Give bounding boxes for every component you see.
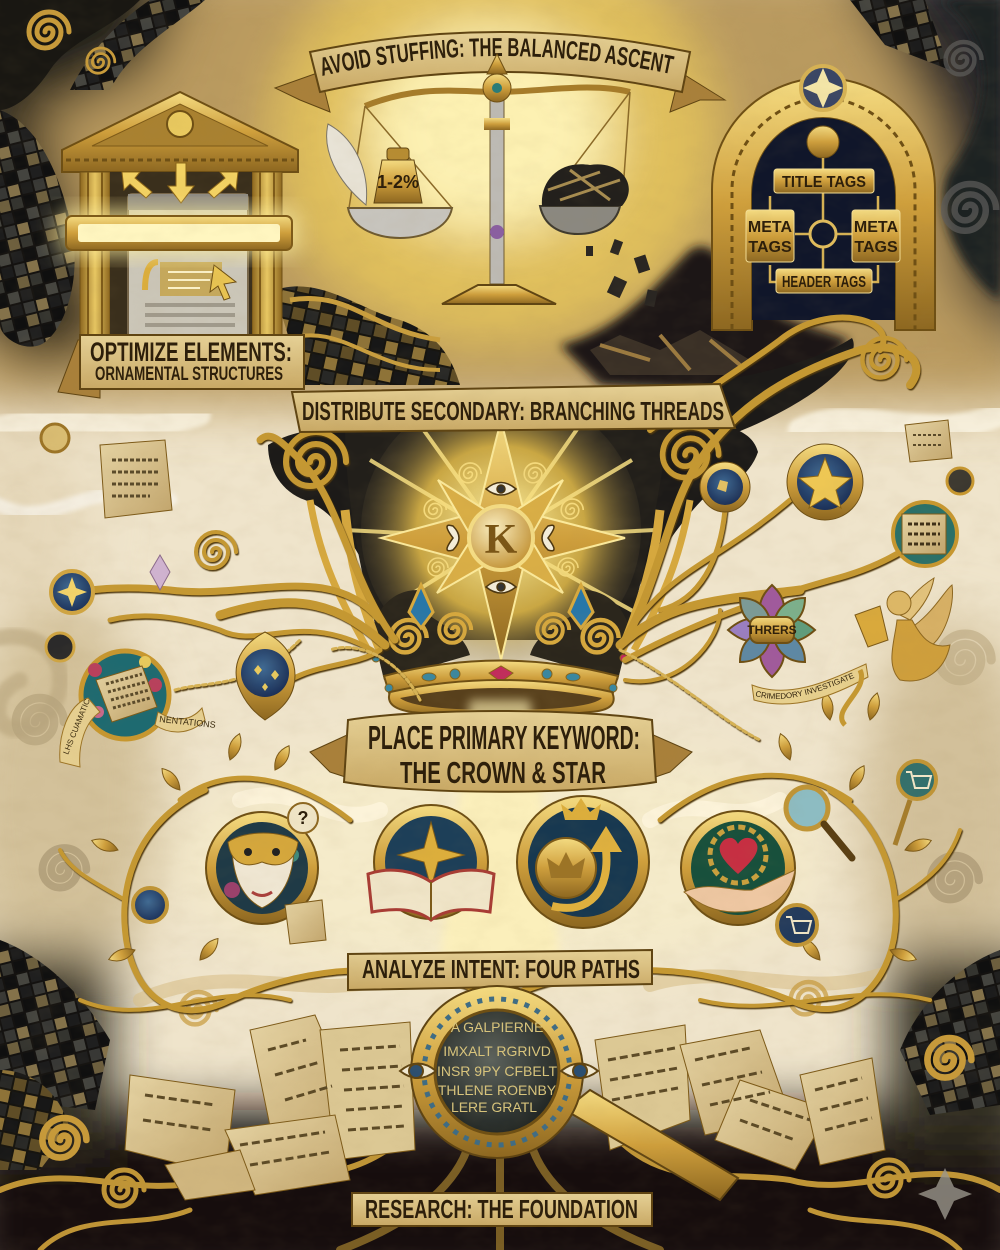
banner: analyze intent: ANALYZE INTENT: FOUR PATHS <box>362 954 640 984</box>
star glow <box>361 390 641 670</box>
schematic connectors <box>770 158 878 282</box>
temple columns <box>80 172 282 342</box>
crown base <box>389 680 614 717</box>
ribbon: left scroll labels <box>60 697 216 767</box>
light beam below crown <box>440 700 560 960</box>
glowing title bar <box>60 210 298 254</box>
label: header tags: HEADER TAGS <box>782 274 866 291</box>
banner: avoid stuffing: AVOID STUFFING: THE BALANCED ASCENT <box>322 38 675 76</box>
magnifying glass <box>400 986 598 1158</box>
K emblem: K <box>485 517 518 563</box>
panel: research scrolls <box>125 986 885 1200</box>
panel: four intent paths <box>133 761 936 945</box>
icon: magnifying glass on vine <box>786 787 852 858</box>
panel: central star fan <box>310 390 690 960</box>
medallion: informational mask: ? <box>298 808 308 828</box>
right thread icons <box>700 420 974 727</box>
crown side scrolls <box>310 500 690 680</box>
falling letters <box>586 239 658 307</box>
magnifier text <box>437 1019 557 1115</box>
banner: avoid stuffing <box>274 31 726 113</box>
arch dark panel <box>752 118 895 320</box>
medallion: heart wreath hand <box>681 811 795 925</box>
icon: gold ring <box>41 424 69 452</box>
medallion: crown coin arrow <box>517 796 649 928</box>
icon: small knot coin <box>46 633 74 661</box>
banner: distribute secondary: DISTRIBUTE SECONDARY: BRANCHING THREADS <box>302 396 724 426</box>
label: meta tags left: META <box>748 219 793 236</box>
icon: lily <box>150 555 170 590</box>
panel: balanced ascent scale <box>274 31 726 307</box>
arch ornament <box>732 98 915 330</box>
star eyes <box>447 482 554 593</box>
banner: distribute secondary <box>292 384 735 432</box>
vine leaves <box>90 692 933 965</box>
scroll: left pile <box>125 1015 415 1200</box>
label: meta tags right <box>852 210 900 262</box>
arch frame <box>712 78 935 330</box>
banner: place primary keyword <box>310 711 692 792</box>
label: meta tags left <box>746 210 794 262</box>
label: meta tags left: TAGS <box>748 239 792 256</box>
medallion: open book compass <box>368 805 494 920</box>
magnifier text: INSR 9PY CFBELT <box>437 1063 557 1079</box>
magnifier text: IMXALT RGRIVD <box>443 1043 551 1059</box>
icon: top right scroll <box>905 420 952 462</box>
eight point star <box>381 420 625 660</box>
icon: flower scroll medallion <box>81 651 169 739</box>
icon: small blue medallion <box>700 462 750 512</box>
temple pediment <box>62 92 298 172</box>
icon: blue globe pendant <box>236 632 295 720</box>
background: cream swirling brush strokes <box>0 410 1000 1000</box>
label: header tags <box>776 269 872 293</box>
label: title tags <box>774 169 874 193</box>
banner: optimize elements <box>58 335 304 398</box>
crown gems <box>372 654 628 692</box>
label: meta tags right: META <box>854 219 899 236</box>
banner: place primary keyword: PLACE PRIMARY KEYWORD: <box>368 719 640 756</box>
crown band <box>384 660 618 696</box>
left pan with feather and weight <box>327 106 452 238</box>
right pan with keyword tangle <box>540 92 630 234</box>
magnifier text: THLENE ROENBY <box>438 1082 557 1098</box>
icon: cart in circle lower <box>777 905 817 945</box>
medallion: informational mask <box>206 803 326 944</box>
ribbon: crimedory investigate <box>751 663 868 727</box>
ribbon: left scroll labels: NENTATIONS <box>159 714 216 730</box>
banner: optimize elements: ORNAMENTAL STRUCTURES <box>95 364 283 385</box>
panel: optimize elements temple <box>58 92 304 398</box>
icon: fleur medallion <box>133 888 167 922</box>
magnifier text: A GALPIERNE <box>451 1019 543 1035</box>
ribbon: crimedory investigate: CRIMEDORY INVESTIGATE <box>756 672 854 699</box>
banner: analyze intent <box>348 950 652 990</box>
browser window <box>128 194 248 340</box>
icon: star medallion large <box>787 444 863 520</box>
panel: meta tags arch <box>712 66 935 330</box>
panel: dark smoke <box>560 0 1000 394</box>
scale beam and post <box>365 54 630 304</box>
banner: research foundation: RESEARCH: THE FOUNDATION <box>365 1194 638 1224</box>
icon: small coin <box>947 468 973 494</box>
label: meta tags right: TAGS <box>854 239 898 256</box>
icon: small scale coin <box>807 126 839 158</box>
panel: dark scroll fans beside star <box>268 338 854 590</box>
magnifier text: LERE GRATL <box>451 1099 537 1115</box>
weight 1-2%: 1-2% <box>377 172 419 192</box>
crown <box>310 500 690 717</box>
ribbon: left scroll labels: LHS CUAMATIC <box>62 697 92 756</box>
icon: threads flower <box>728 585 815 677</box>
icon: corner sparkle <box>918 1168 972 1220</box>
icon: feather <box>327 124 367 205</box>
left thread icons <box>41 424 295 767</box>
scroll: right pile <box>595 1025 885 1170</box>
icon: threads flower: THRERS <box>747 623 797 637</box>
icon: angel with book <box>855 578 953 681</box>
label: title tags: TITLE TAGS <box>782 174 866 191</box>
magnifier eyes <box>400 1064 598 1078</box>
gold vines <box>60 318 960 1010</box>
roots and bottom dark field <box>0 1130 1000 1250</box>
K emblem <box>469 506 533 570</box>
icon: parchment scroll <box>100 440 172 518</box>
icon: floral square <box>893 502 957 566</box>
banner: place primary keyword: THE CROWN & STAR <box>400 755 606 790</box>
arch crown star <box>801 66 845 110</box>
star rays <box>345 425 655 620</box>
banner: research foundation <box>352 1193 652 1226</box>
arrows pointing to title bar <box>122 163 238 203</box>
icon: star medallion <box>51 571 93 613</box>
magnifier handle <box>565 1090 738 1200</box>
banner: optimize elements: OPTIMIZE ELEMENTS: <box>90 337 292 367</box>
icon: cart in circle upper <box>895 761 936 845</box>
